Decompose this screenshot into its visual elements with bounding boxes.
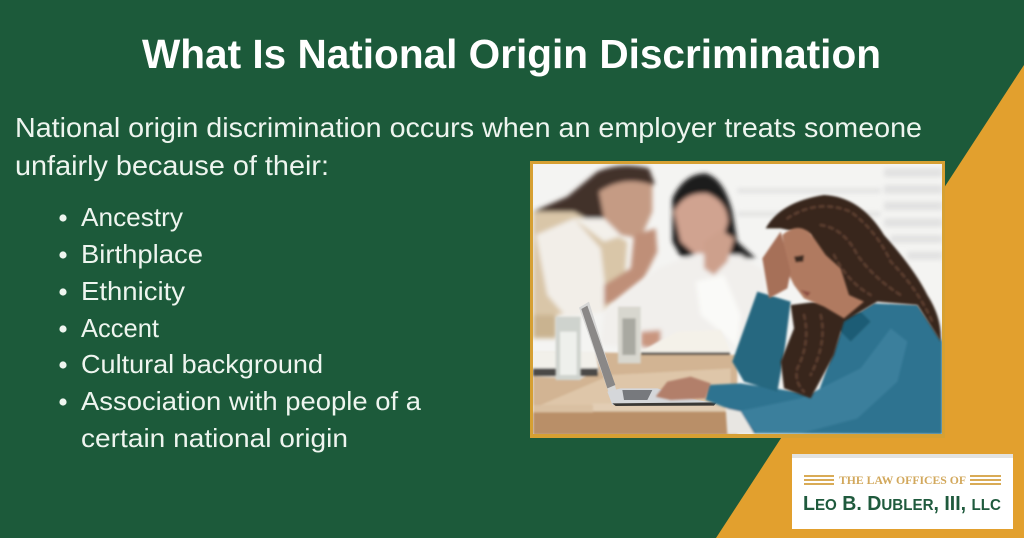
bullet list: Ethnicity — [81, 276, 185, 306]
bullet list — [59, 202, 422, 453]
curly hair — [766, 195, 941, 398]
woman left blurred — [533, 166, 657, 338]
intro paragraph — [15, 112, 922, 181]
bullet list: certain national origin — [81, 423, 348, 453]
logo rules — [804, 475, 1001, 485]
bullet list: Birthplace — [81, 239, 203, 269]
laptop — [579, 302, 717, 406]
photo frame — [530, 161, 945, 438]
logo line 1: THE LAW OFFICES OF — [839, 473, 966, 487]
gold corner shape — [716, 65, 1024, 538]
seated woman shirt — [706, 292, 942, 434]
intro paragraph: unfairly because of their: — [15, 150, 329, 181]
intro paragraph: National origin discrimination occurs when an employer treats someone — [15, 112, 922, 143]
bullet list: Cultural background — [81, 349, 323, 379]
window background — [533, 164, 943, 434]
title: What Is National Origin Discrimination — [142, 31, 881, 77]
logo line 2: LEO B. DUBLER, III, LLC — [803, 493, 1001, 515]
woman middle blurred — [601, 173, 766, 352]
photo: three women at a table with laptop — [533, 164, 943, 435]
bullet list: Ancestry — [81, 202, 183, 232]
bullet list: Association with people of a — [81, 386, 422, 416]
seated woman face and hand — [656, 228, 864, 400]
water glasses — [556, 307, 641, 380]
bullet list: Accent — [81, 313, 160, 343]
law firm logo — [792, 454, 1013, 529]
table — [533, 330, 737, 435]
